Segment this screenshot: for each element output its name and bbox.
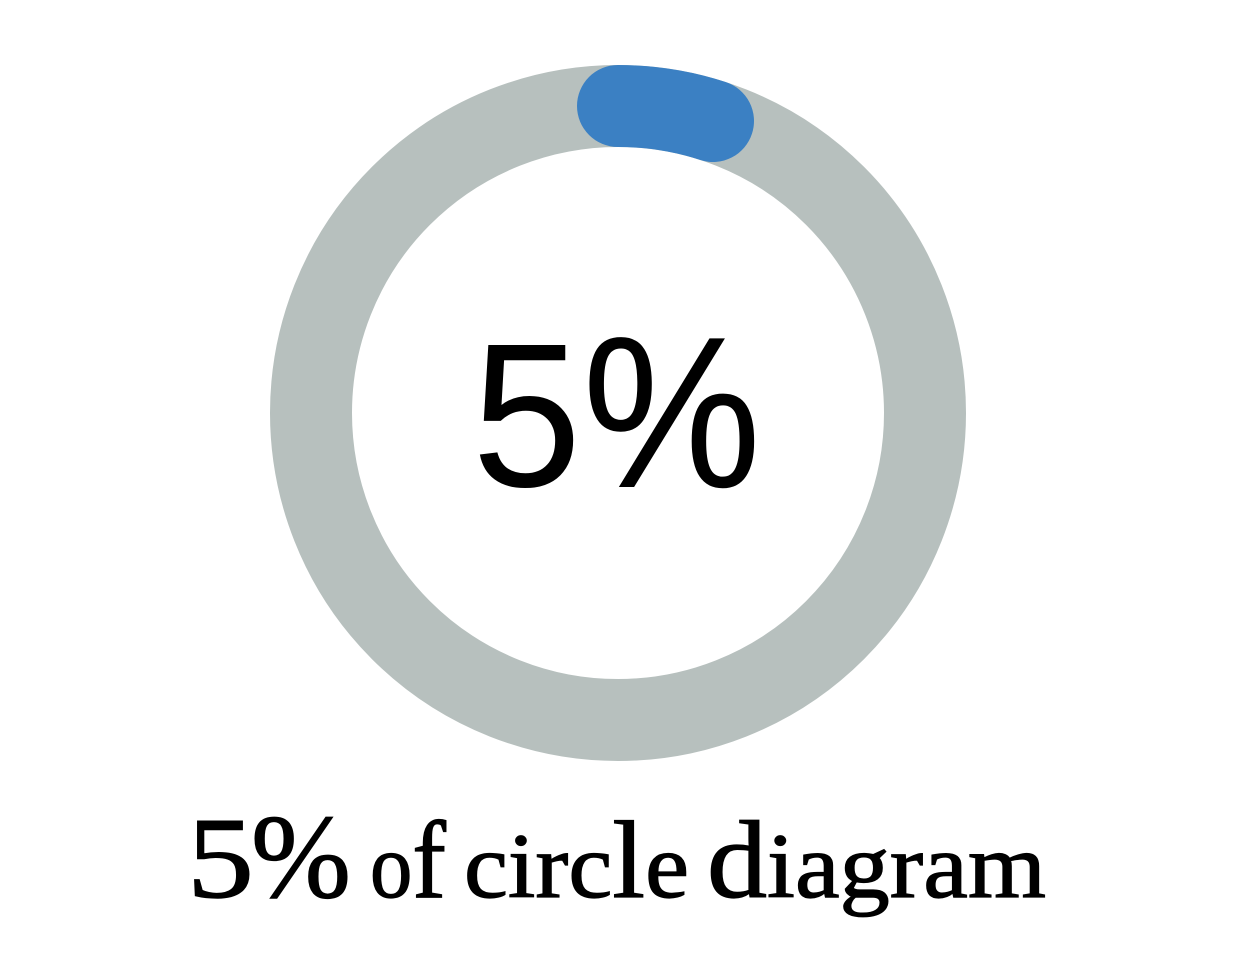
- caption: circle: [464, 799, 689, 921]
- caption: %: [251, 790, 351, 923]
- caption: [187, 790, 1046, 923]
- center percentage: 5: [472, 301, 581, 530]
- center percentage: %: [582, 291, 761, 533]
- center percentage: [472, 291, 761, 533]
- caption: of: [370, 799, 446, 921]
- 5% progress arc: [618, 106, 713, 121]
- caption: 5: [187, 795, 254, 923]
- donut track: [311, 106, 925, 720]
- caption: diagram: [707, 799, 1046, 921]
